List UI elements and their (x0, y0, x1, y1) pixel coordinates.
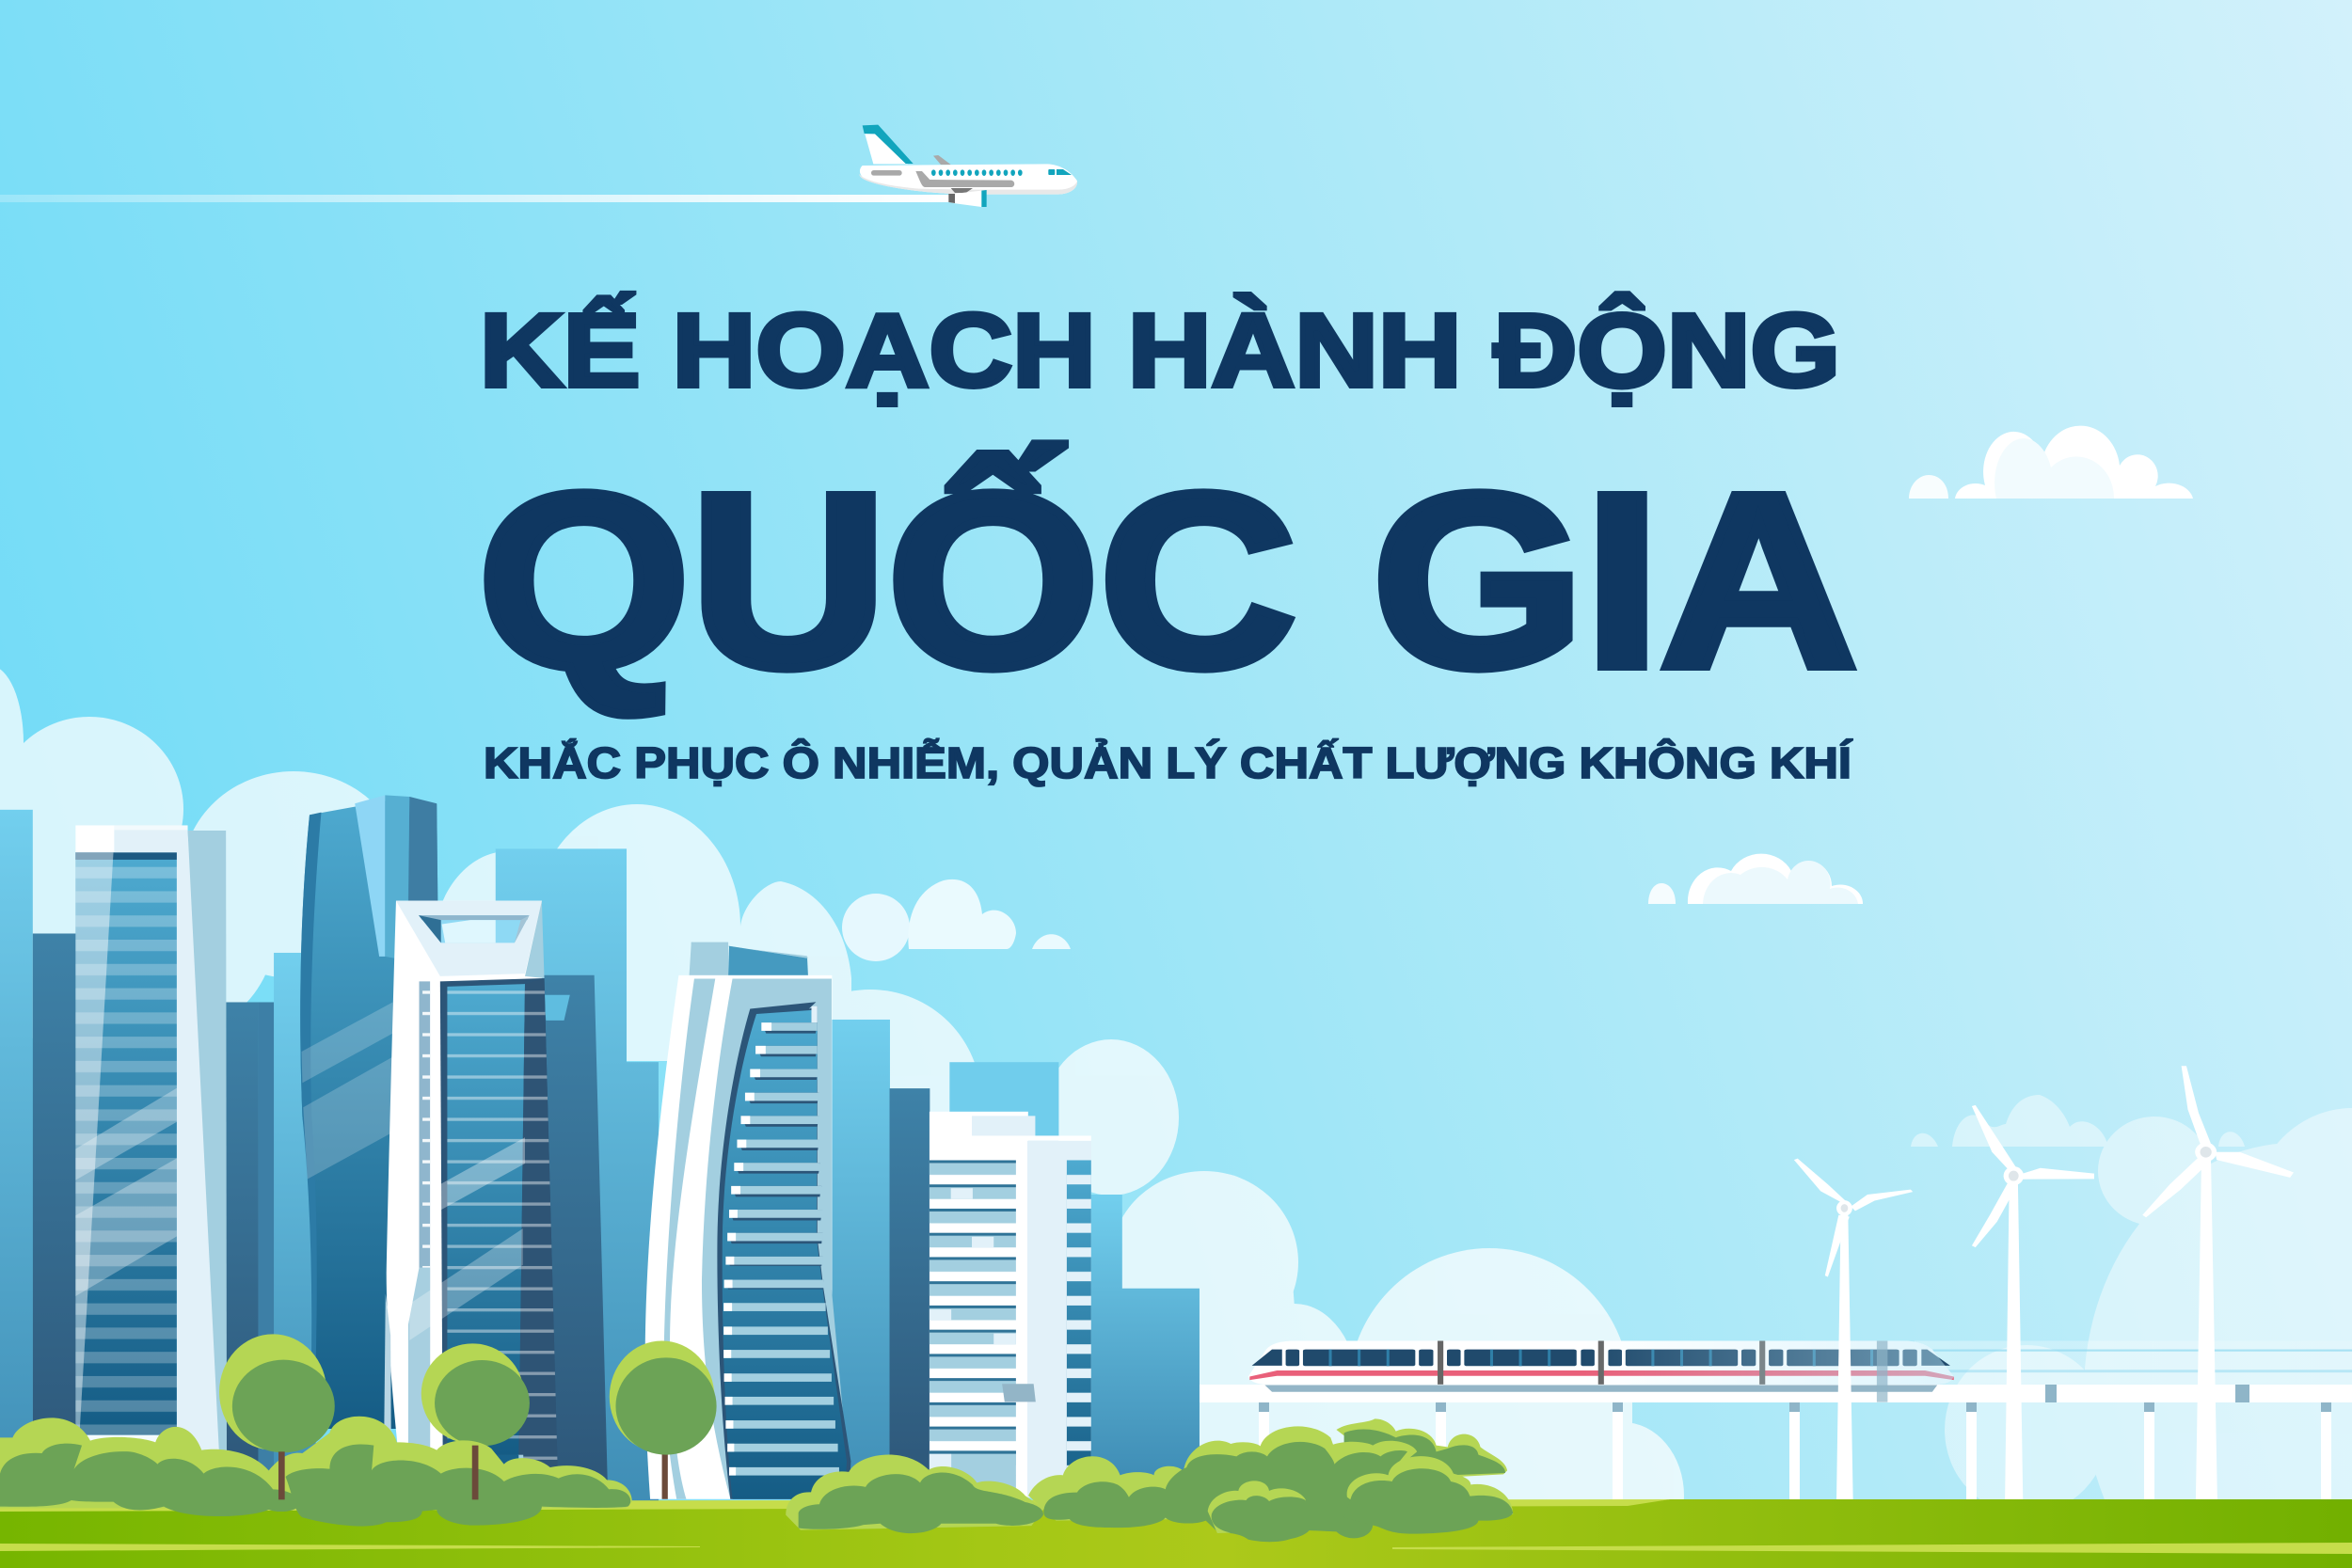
train (1248, 1341, 2352, 1402)
bushes: main light (1028, 1426, 1341, 1521)
tree 3 and bush (610, 1340, 1044, 1533)
tree trunks (278, 1446, 478, 1499)
tower: curved glass (300, 795, 438, 1429)
ground (0, 1499, 2352, 1568)
airplane contrail (0, 195, 950, 202)
title line 2: QUỐC GIA (478, 442, 1857, 719)
skyline right: towers 4 and 5 (645, 942, 1200, 1501)
background clouds left (0, 666, 1684, 1568)
tower: glass with white frame left (75, 825, 227, 1505)
tree 1 (219, 1334, 335, 1452)
icon: airplane (859, 125, 1077, 207)
bush: dark right (286, 1444, 630, 1527)
bush: centre left light (786, 1454, 1044, 1530)
trees and bushes left (0, 1334, 632, 1527)
tower: curved with louvers (645, 942, 850, 1499)
tower: white apartment block (930, 1112, 1091, 1500)
turbine 2 (1972, 1105, 2094, 1499)
bushes: middle light (1330, 1441, 1417, 1475)
cloud: upper right (1909, 426, 2193, 499)
bushes: light layer (0, 1417, 632, 1508)
turbine 3 (2142, 1066, 2294, 1499)
tower: white frame with crown (384, 901, 559, 1505)
title line 1: KẾ HOẠCH HÀNH ĐỘNG (480, 293, 1840, 408)
building: sky blue right of tower 4 (832, 1020, 890, 1501)
bush: dark left (0, 1444, 300, 1516)
bush: small front (1208, 1481, 1310, 1541)
building: block above tower 5 (949, 1062, 1058, 1191)
elevated rail bridge (1200, 1385, 2352, 1501)
bushes: back cluster (1336, 1418, 1507, 1480)
building: mid blue (274, 953, 316, 1507)
wind turbines (1794, 1066, 2294, 1499)
building: sky blue block (496, 848, 659, 1505)
skyline left: towers 1 to 3 (0, 795, 659, 1507)
small clouds by skyline (842, 879, 1071, 961)
building: dark next to tower 5 (890, 1088, 930, 1501)
tree 2 (421, 1343, 530, 1446)
tree 3 (610, 1340, 717, 1499)
building: far left (0, 810, 33, 1507)
bush: centre left dark (799, 1472, 1043, 1533)
bush: right front (1344, 1456, 1513, 1534)
bushes: main dark (1043, 1442, 1407, 1542)
building: dark block (33, 933, 76, 1506)
turbine 1 (1794, 1159, 1913, 1499)
speed streaks (1915, 1341, 2352, 1385)
subtitle: KHẮC PHỤC Ô NHIỄM, QUẢN LÝ CHẤT LƯỢNG KHÔNG KHÍ (484, 738, 1852, 787)
background clouds right (1911, 1095, 2352, 1568)
cloud: middle right (1648, 854, 1863, 904)
building: dark columns (226, 1002, 275, 1507)
bushes centre (1028, 1418, 1513, 1542)
building: stepped blocks right (1090, 1195, 1200, 1479)
building: dark behind tower 3 (544, 975, 608, 1505)
